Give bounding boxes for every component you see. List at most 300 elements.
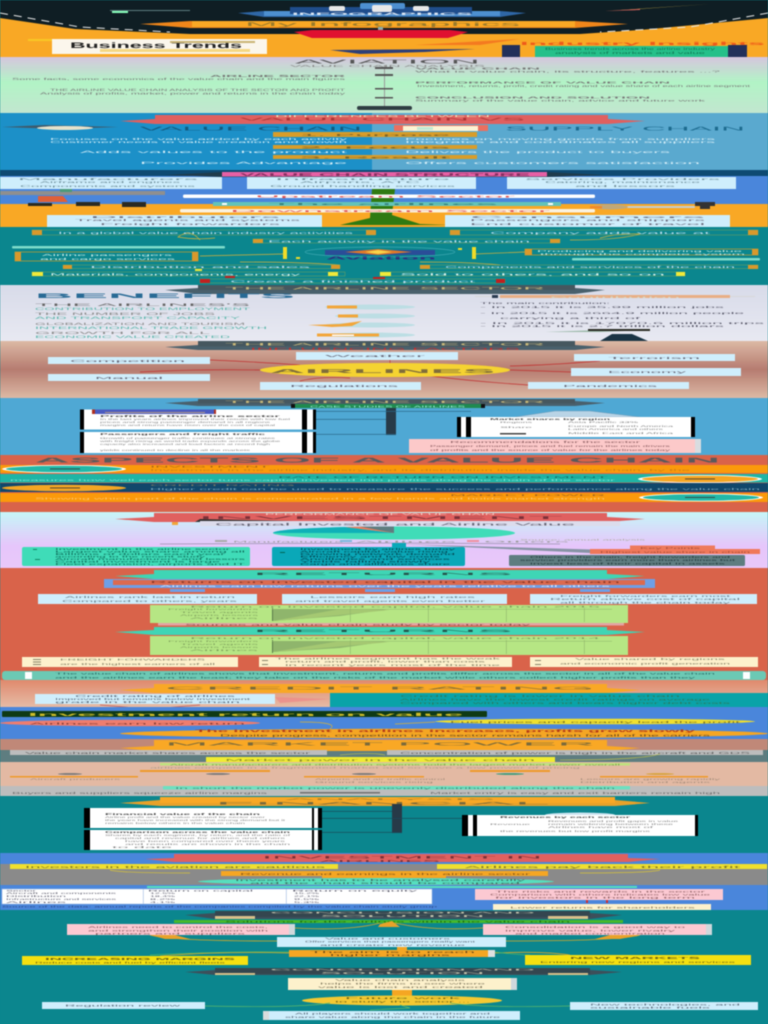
teal box: Investment by airlines today <box>300 547 458 551</box>
right blue box <box>570 1002 758 1010</box>
panel: conclusion <box>0 910 768 967</box>
grey label right: Concentration of power is high in the aircraft and GDS <box>400 751 750 755</box>
green bar: Solutions for the airlines within the value chain <box>225 921 574 924</box>
chart 1: Airports lessors <box>180 614 263 617</box>
headline tag: Business trends across the airline industry <box>545 47 715 51</box>
yellow-capped row left <box>32 269 345 276</box>
mint box: Billions of dollars each year <box>55 552 225 556</box>
orange box <box>289 947 495 957</box>
card 2: and results are shown in the chain <box>125 843 293 846</box>
data table: 18.4% <box>150 895 178 898</box>
card 3: Regions <box>500 421 536 424</box>
benefits text <box>35 303 269 339</box>
factor boxes: Regulations <box>290 384 401 388</box>
orange ellipse <box>120 729 768 738</box>
teal box: Aircraft capital value rising <box>300 549 450 553</box>
left blue box: Regulation review <box>65 1004 185 1008</box>
ribbon heading: MARKET POWER <box>165 742 604 746</box>
connectors <box>140 360 600 385</box>
benefits heading: BENEFITS <box>35 293 300 300</box>
data table: Return on capital <box>148 890 256 892</box>
chart 2: Airports lessors <box>180 646 263 649</box>
left topics: AIRLINE SECTOR <box>210 74 349 78</box>
chart 1 <box>150 605 628 623</box>
comparison bars: 1. Purpose <box>300 133 453 137</box>
card 3 <box>457 411 695 437</box>
card 3: Share <box>500 426 536 429</box>
top boxes: Services Providers <box>525 178 726 181</box>
benefits text: THE AIRLINES'S <box>35 303 255 307</box>
pink note <box>409 439 701 453</box>
subheading: VALUE CHAIN ANALYSIS <box>290 64 485 68</box>
chart 1: Freight forwarders <box>168 608 263 611</box>
ribbon heading: THE AIRLINE SECTOR <box>225 342 548 346</box>
left topics: THE AIRLINE VALUE CHAIN ANALYSIS OF THE SECTOR AND PROFIT <box>50 88 345 92</box>
band: roic: RATE OF RETURN ON INVESTMENT <box>278 476 612 479</box>
data table: 15.2% <box>294 892 322 895</box>
cream note: Lower returns for shareholders <box>510 906 698 910</box>
yellow ellipse: Fuel prices and capacity lead the profit <box>450 720 741 724</box>
caption: Source: annual analysis <box>520 538 650 542</box>
connectors <box>160 543 610 553</box>
top boxes: Airports, ATC <box>300 181 421 184</box>
grey label right <box>387 750 763 755</box>
panel: airline profits <box>0 707 768 739</box>
author card <box>28 39 267 54</box>
orange ellipse: Despite progress, competition in the sector remains harsh for all of the carriers <box>220 734 712 738</box>
mint box: Fleet expansion, airports and IT <box>55 562 246 566</box>
truck <box>0 189 165 207</box>
red-capped row <box>200 276 505 284</box>
card 2: yields continued to decline in all the markets <box>100 449 253 452</box>
card 2 <box>84 830 322 850</box>
bottom boxes: Distributors <box>90 216 290 219</box>
timeline <box>357 65 412 110</box>
left blue box <box>42 1002 205 1009</box>
green bar <box>174 920 623 924</box>
comparison text: Focuses on moving goods from suppliers <box>405 137 718 141</box>
card 3: Market shares by region <box>490 418 612 421</box>
chart 1: Travel agents <box>180 611 263 614</box>
right topics: What is value chain, its structure, features ...? <box>415 70 722 74</box>
headline tag: analysis of markets and value <box>555 51 705 55</box>
contribution list: - In 2015 it is 2.7 trillion dollars <box>480 325 729 328</box>
comparison bars <box>273 132 477 160</box>
card 3: Latin America and others <box>568 428 666 431</box>
teal summary bar: and the airlines earn the least; they take on the risks of the market while others collect higher profits than they <box>55 676 698 680</box>
contribution list: Contribution <box>550 296 687 299</box>
bottom boxes <box>47 215 730 227</box>
pink boxes: Consolidation is a good way to <box>505 926 688 929</box>
right topics: Investment, returns, profit, credit rating and value share of each airline segment <box>417 84 750 88</box>
panel: financial summary <box>0 796 768 854</box>
mint ellipse <box>198 878 554 885</box>
capped text row 3 <box>253 239 560 244</box>
pink boxes: Airlines need to control the costs, <box>88 926 269 929</box>
ribbon heading: AIRLINES <box>320 859 441 863</box>
stat texts: Lessors are growing rapidly <box>580 778 724 781</box>
yellow box right: NEW MARKETS <box>570 956 700 960</box>
blue boxes: all through the chain today <box>560 600 733 604</box>
legend: Airlines <box>356 540 466 544</box>
card 1 <box>84 808 322 828</box>
blue boxes: Return above cost of capital <box>550 597 742 601</box>
card 3: Airlines have most of <box>548 826 655 829</box>
panel: credit rating <box>0 680 768 709</box>
teal box <box>272 547 465 566</box>
top boxes: Airframe and engines <box>40 181 184 184</box>
bottom boxes: Freight forwarders <box>100 223 286 226</box>
factor boxes: Manual <box>95 376 165 380</box>
yellow ellipse: to study the sector ... <box>335 1000 472 1004</box>
grey label left <box>10 750 327 755</box>
bottom boxes: Travel agents and systems <box>75 219 305 222</box>
dark green bar: Investment return on value <box>28 712 467 717</box>
card 3: Revenue <box>490 823 534 826</box>
mint box: Capital investment is large <box>55 559 222 563</box>
author card: Business Trends <box>70 41 243 50</box>
card 2: have been compared over these years <box>125 840 288 843</box>
card 2: Comparison across the value chain <box>105 831 292 834</box>
airlines ellipse: AIRLINES <box>270 369 498 375</box>
contribution list <box>475 295 768 328</box>
blue boxes: Airlines rank last in return <box>65 595 237 599</box>
capped text row 5: Components and services of the chain <box>445 265 737 269</box>
mint conclusion <box>163 786 630 790</box>
factor boxes <box>48 352 741 390</box>
right blue box: New technologies, and <box>590 1004 743 1006</box>
light bar <box>12 246 225 248</box>
benefits text: ECONOMIC VALUE CREATED <box>35 335 232 339</box>
stat texts: Airports and air traffic control <box>315 778 447 781</box>
ribbon heading: THE AIRLINE SECTOR <box>225 400 551 404</box>
pink note: Comparison with others indicates low value <box>490 894 712 896</box>
yellow label left: Investors in the aviation are cautious <box>25 865 328 869</box>
band: market power <box>0 493 768 502</box>
ribbon heading: SOLUTION <box>320 971 485 975</box>
text box: grade in the value chain <box>55 700 243 704</box>
band: investment: Investment in the airline industry, and its distribution inside the value chain, by the <box>150 468 692 472</box>
data table: Infrastructure and services <box>6 898 119 901</box>
data table <box>2 889 432 904</box>
light bar <box>572 258 760 260</box>
stat texts: Ground services rising <box>315 781 436 784</box>
green label <box>291 404 485 408</box>
connector ticks <box>170 589 610 592</box>
blue callout: Returns on invested capital in the value chain <box>150 580 623 584</box>
legend: Manufacturers <box>233 540 349 544</box>
right topics <box>415 66 750 102</box>
top boxes <box>0 177 736 189</box>
data table: 8.2% <box>150 898 179 901</box>
yellow-capped row left: Materials, components, energy <box>50 272 302 276</box>
plane at right <box>590 202 715 210</box>
left topics: Analysis of profits, market, power and returns in the chain today <box>40 92 346 96</box>
chart 2: Freight forwarders <box>168 640 263 643</box>
contribution list: - In 2015 it is 17070.6 million trips <box>480 322 768 325</box>
panel: investment <box>0 512 768 568</box>
ribbon heading: INVESTMENT <box>198 515 571 520</box>
band: credit rating <box>0 483 768 492</box>
benefits text: GROWTH FOR ALL <box>35 331 211 335</box>
card 1: margins and returns have risen over the cost of capital <box>100 424 276 427</box>
band: credit rating: Higher credit can be used to measure the success and performance along the value chain <box>150 487 762 491</box>
teal box <box>330 693 768 707</box>
connectors <box>340 754 660 760</box>
ribbon heading <box>120 740 640 751</box>
headline tag: Industry Insights <box>520 41 768 46</box>
yellow ellipse <box>302 996 502 1006</box>
pink note: for investors in the long term <box>495 896 695 900</box>
card 2: capital and revenue for airlines and others <box>115 837 288 840</box>
blue box <box>277 937 506 947</box>
card 1: Profits of the airline sector <box>100 415 280 418</box>
ribbon heading: RETURNS <box>253 572 513 576</box>
ribbon heading <box>120 797 650 806</box>
data table: Sector <box>6 890 37 892</box>
ribbon heading: FINANCIAL <box>215 802 550 806</box>
airlines ellipse <box>260 363 510 377</box>
right capped box: Producing and delivering value <box>537 250 745 253</box>
data table: Airlines <box>6 901 72 904</box>
value rows: Upstream Sector <box>255 194 515 198</box>
cream box: value is lost and created <box>318 986 486 989</box>
cream box <box>288 978 517 990</box>
top boxes: Infrastructure <box>275 178 456 181</box>
yellow label: Market power in the value chain <box>225 758 537 762</box>
comparison text: Customer needs to value creation and growth <box>50 140 349 144</box>
headline tag <box>415 39 768 57</box>
teal box: Airlines have the lowest credit ratings on average <box>400 698 712 702</box>
bird icon <box>2 125 118 130</box>
comparison bars: 2. Focus <box>300 146 456 150</box>
card 1: the years have increased with the strong demand but it <box>105 819 286 822</box>
teal summary bar <box>2 671 766 680</box>
yellow-capped row right: Sold to others, and so on <box>400 272 667 276</box>
blue boxes: and travel agents even better <box>295 599 485 603</box>
ribbon heading: ANALYSIS <box>285 798 502 801</box>
card 2: Growth of passenger traffic continues at strong rates <box>100 437 277 440</box>
comparison text: Integrates and coordinates all suppliers <box>405 140 718 144</box>
chart 1: Airlines <box>190 617 266 620</box>
card 2: Passengers and freight traffic <box>100 433 267 436</box>
orange ellipse: The investment in airlines increases, profits grow slowly <box>195 729 695 733</box>
panel: aviation contents <box>0 57 768 113</box>
teal box: Compared with others and bears higher debt costs <box>400 701 732 705</box>
plane icon <box>545 329 650 341</box>
comparison text: Focuses on the value added by each activity <box>50 137 349 141</box>
card 3: Revenues by each sector <box>500 816 630 819</box>
pink boxes: and market concentration <box>515 932 668 936</box>
yellow ellipse <box>435 719 755 724</box>
band: market power: Showing which part of the chain is concentrated in a few hands and holds market strength <box>35 496 607 500</box>
card 2: with freight rising as world trade expands across the globe <box>100 440 282 443</box>
cream note <box>493 904 711 910</box>
heading: AVIATION <box>295 60 480 66</box>
logo banner: INFOGRAPHICS <box>292 12 477 16</box>
card 3: remain widening between these <box>548 823 675 826</box>
top boxes: Ground handling services <box>270 185 459 188</box>
blue boxes <box>38 594 757 604</box>
bottom boxes: Passengers and shippers <box>470 219 711 222</box>
center emblem <box>394 125 488 131</box>
panel: header <box>0 0 768 57</box>
yellow label <box>206 757 555 762</box>
yellow box right: Entering new regions and services <box>540 961 738 964</box>
ribbon heading: CONCLUSION AND <box>270 912 538 914</box>
left capped box: and cargo services <box>40 257 178 261</box>
pink bar: Sources and value chain study by sector today <box>185 624 536 626</box>
chart 2: Return on invested capital, value chain 2014 <box>190 637 606 640</box>
top boxes: and lessors <box>575 185 680 188</box>
orange labels: Highest value share in chain <box>600 550 752 554</box>
cream boxes: are the highest earners of all <box>60 662 217 666</box>
panel: airline sector cases <box>0 398 768 455</box>
teal box: Cargo and alliances share <box>300 562 452 566</box>
stat orange bars <box>10 770 708 778</box>
blue box: and create new revenue <box>320 944 468 947</box>
center pillar <box>316 408 471 435</box>
ribbon heading 2 <box>115 627 645 635</box>
teal box: Growing network demand <box>300 552 457 556</box>
text box: Credit rating of airlines <box>75 694 238 698</box>
tree <box>340 189 450 225</box>
mint conclusion: In short the market power is unevenly distributed along the chain <box>175 787 618 790</box>
center pillar <box>322 804 462 833</box>
heading: ASPECTS OF A VALUE CHAIN <box>35 458 720 464</box>
ribbon heading: CREDIT RATING <box>165 686 595 690</box>
text box <box>35 694 275 704</box>
logo banner <box>238 3 526 17</box>
value chain heading: VALUE CHAIN <box>140 126 362 132</box>
bottom blue box: share value along the chain in the future <box>285 1016 503 1019</box>
data table: 12.5% <box>150 892 178 895</box>
card 2: to date <box>112 846 177 849</box>
yellow box left <box>22 956 248 965</box>
grey notes: Market entry is easy and exit barriers remain high <box>430 791 721 795</box>
teal box: Ancillaries and services <box>300 557 453 561</box>
ribbon heading <box>185 968 622 975</box>
supply chain heading: SUPPLY CHAIN <box>505 126 745 132</box>
capped text row 2: Company adds value at <box>490 231 711 235</box>
legend: Others <box>484 540 578 544</box>
orange labels: Key Points <box>640 546 703 550</box>
bottom boxes: Consumers <box>470 216 717 219</box>
grey box: invest less of their capital in assets <box>530 562 728 566</box>
panel: influencing factors <box>0 341 768 398</box>
mint ellipse: Investment has to be analysed carefully <box>235 878 528 882</box>
center aviation emblem: Aviation <box>326 256 438 260</box>
red emblem <box>294 30 468 38</box>
capped text row 4: Distribution and sales <box>90 265 314 269</box>
band: roic <box>0 474 768 483</box>
yellow label left <box>10 864 338 869</box>
grey box <box>509 555 745 566</box>
right topics: Summary of the value chain, advice and future work <box>415 98 708 102</box>
pink boxes: and strengthen their position with <box>88 930 271 932</box>
top boxes: Components and systems <box>20 185 199 188</box>
cream boxes: Value shared by regions <box>575 657 728 661</box>
yellow label right: Airlines pay back their profit <box>465 865 741 869</box>
mint box: Aircraft manufacturers and lessors <box>55 557 248 561</box>
blue callout: Airlines earn low returns over the years relative to all others <box>160 584 614 588</box>
cream boxes: The airlines segment has the weak <box>275 656 503 660</box>
left capped box: Airline passengers <box>42 253 175 257</box>
comparison text <box>50 137 718 165</box>
benefits text: AND TRANSPORT CAPACITY <box>35 316 243 320</box>
benefits text: THE NUMBER OF JOBS <box>35 312 218 316</box>
green connectors <box>150 952 530 955</box>
panel: market power <box>0 739 768 796</box>
ribbon heading: VALUE CHAIN STRUCTURE <box>240 172 532 177</box>
factor boxes: Terrorism <box>608 356 704 360</box>
capped text row 1 <box>32 230 376 235</box>
yellow box left: Reduce costs and fuel by efficient fleets <box>35 962 228 964</box>
grey label left: Value chain market shares across the sector <box>25 751 310 755</box>
right blue box: sustainable fuels <box>590 1006 714 1010</box>
red-capped row: Create a finished product <box>230 280 476 284</box>
benefits text: GLOBALIZATION AND TOURISM <box>35 322 246 326</box>
grey notes <box>12 791 721 795</box>
data table: Return on equity <box>292 890 423 892</box>
ribbon heading: SOLUTION <box>320 914 485 918</box>
blue callout <box>104 579 655 588</box>
comparison text: Delivers the product to buyers <box>405 150 673 154</box>
orange block <box>221 871 548 878</box>
blue boxes: Freight forwarders earn most <box>560 594 731 598</box>
blue box: Value and customers <box>325 938 454 940</box>
red ticks <box>586 900 608 903</box>
capped text row 2 <box>450 230 758 235</box>
grey notes: Buyers and suppliers squeeze airline margins <box>12 791 269 795</box>
yellow label right <box>437 864 767 869</box>
blue boxes: Lessors earn high rates <box>310 595 478 599</box>
teal box: Credit rating is lower in value chain <box>400 694 682 698</box>
contribution list: The main contribution: <box>480 302 611 305</box>
ribbon heading <box>115 570 645 579</box>
right topics: CONCLUSION AND SOLUTION <box>415 95 650 99</box>
band: market power: MARKET POWER <box>450 494 607 497</box>
panel: airline sector benefits <box>0 285 768 341</box>
benefits text: CONTRIBUTION TO EMPLOYMENT <box>35 307 250 311</box>
pink boxes: partners and suppliers <box>95 932 249 936</box>
left topics <box>12 74 349 96</box>
value rows: The airlines <box>268 202 507 206</box>
panel: how value chain works <box>0 227 768 285</box>
green note: airlines compete in a fragmented market and so have a low power of pricing <box>150 766 584 770</box>
orange labels <box>590 546 760 554</box>
yellow-capped row right <box>380 272 685 276</box>
bottom boxes: End customer of travel <box>470 223 709 226</box>
ribbon heading: PERFORMANCE OF VALUE CHAIN <box>265 513 497 516</box>
capped text row 5 <box>420 265 758 269</box>
teal box: Efficiency and low costs <box>300 554 443 558</box>
connectors <box>300 722 435 729</box>
card 3: Revenues and profit gaps in value <box>548 820 680 823</box>
cream boxes: FREIGHT FORWARDERS <box>60 658 206 662</box>
card 3: the revenues but low profit margins <box>500 830 653 833</box>
center pills <box>308 304 415 338</box>
mint ellipse: and the chain should be compared <box>250 881 523 885</box>
right capped box <box>525 249 758 256</box>
panel: value chain structure <box>0 170 768 227</box>
ribbon heading <box>120 115 645 124</box>
panel: value chain vs supply chain <box>0 113 768 170</box>
contribution list: - In 2015 it is 35.99 million jobs <box>480 306 729 309</box>
cream box: Value chain analysis <box>335 979 469 982</box>
ribbon heading <box>165 341 605 351</box>
yellow ellipse: Future work <box>345 997 466 1000</box>
